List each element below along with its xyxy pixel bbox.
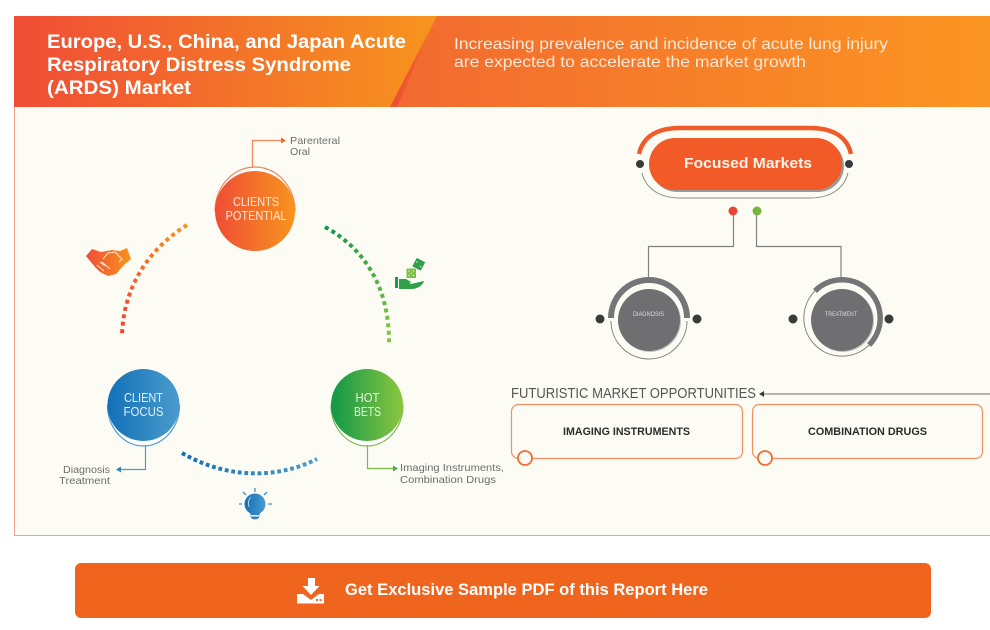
focused markets pill: Focused Markets <box>684 155 812 172</box>
dotted arc: green <box>325 227 389 345</box>
node: hot bets: BETS <box>354 404 381 419</box>
title <box>47 32 406 99</box>
icon: hand with dice <box>395 258 425 289</box>
focused markets pill <box>636 128 853 198</box>
market circle: diagnosis: DIAGNOSIS <box>633 312 664 318</box>
button: sample pdf <box>75 563 931 618</box>
panel: content background <box>14 107 990 536</box>
connector dot: red <box>728 206 738 216</box>
subtitle: are expected to accelerate the market growth <box>454 54 806 71</box>
market circle: diagnosis <box>596 280 702 359</box>
node: client focus: CLIENT <box>124 390 163 405</box>
label: imaging instruments, combination drugs: Combination Drugs <box>400 474 496 486</box>
node: client focus <box>59 369 180 487</box>
button: sample pdf: Get Exclusive Sample PDF of this Report Here <box>345 580 708 599</box>
title: Respiratory Distress Syndrome <box>47 55 351 76</box>
card: combination drugs <box>752 404 982 465</box>
node: client focus: FOCUS <box>124 404 164 419</box>
subtitle <box>454 36 888 71</box>
icon: light bulb <box>239 488 272 520</box>
title: (ARDS) Market <box>47 78 192 99</box>
node: hot bets <box>331 369 504 486</box>
node: clients potential: POTENTIAL <box>226 208 286 223</box>
card: combination drugs: COMBINATION DRUGS <box>808 426 927 438</box>
dotted arc: blue <box>182 453 317 473</box>
node: clients potential <box>215 135 340 251</box>
market circle: treatment <box>788 280 894 356</box>
icon: handshake <box>86 248 131 276</box>
card: imaging instruments <box>512 404 742 465</box>
market circle: treatment: TREATMENT <box>825 312 857 318</box>
heading: futuristic market opportunities: FUTURISTIC MARKET OPPORTUNITIES <box>511 385 756 402</box>
connector lines <box>648 215 841 279</box>
title: Europe, U.S., China, and Japan Acute <box>47 32 406 53</box>
node: hot bets: HOT <box>356 390 380 405</box>
subtitle: Increasing prevalence and incidence of acute lung injury <box>454 36 888 53</box>
node: clients potential: CLIENTS <box>233 194 279 209</box>
panel border <box>14 107 990 536</box>
label: parenteral, oral: Oral <box>290 146 310 158</box>
connector dot: green <box>752 206 762 216</box>
label: imaging instruments, combination drugs <box>400 462 504 486</box>
label: diagnosis, treatment <box>59 464 110 487</box>
label: parenteral, oral: Parenteral <box>290 135 340 147</box>
label: imaging instruments, combination drugs: Imaging Instruments, <box>400 462 504 474</box>
label: parenteral, oral <box>290 135 340 158</box>
arrow <box>759 391 990 397</box>
header banner <box>14 16 990 107</box>
label: diagnosis, treatment: Treatment <box>59 475 110 487</box>
label: diagnosis, treatment: Diagnosis <box>63 464 110 476</box>
dotted arc: orange <box>122 225 187 335</box>
card: imaging instruments: IMAGING INSTRUMENTS <box>563 426 690 438</box>
icon: download <box>297 578 324 604</box>
